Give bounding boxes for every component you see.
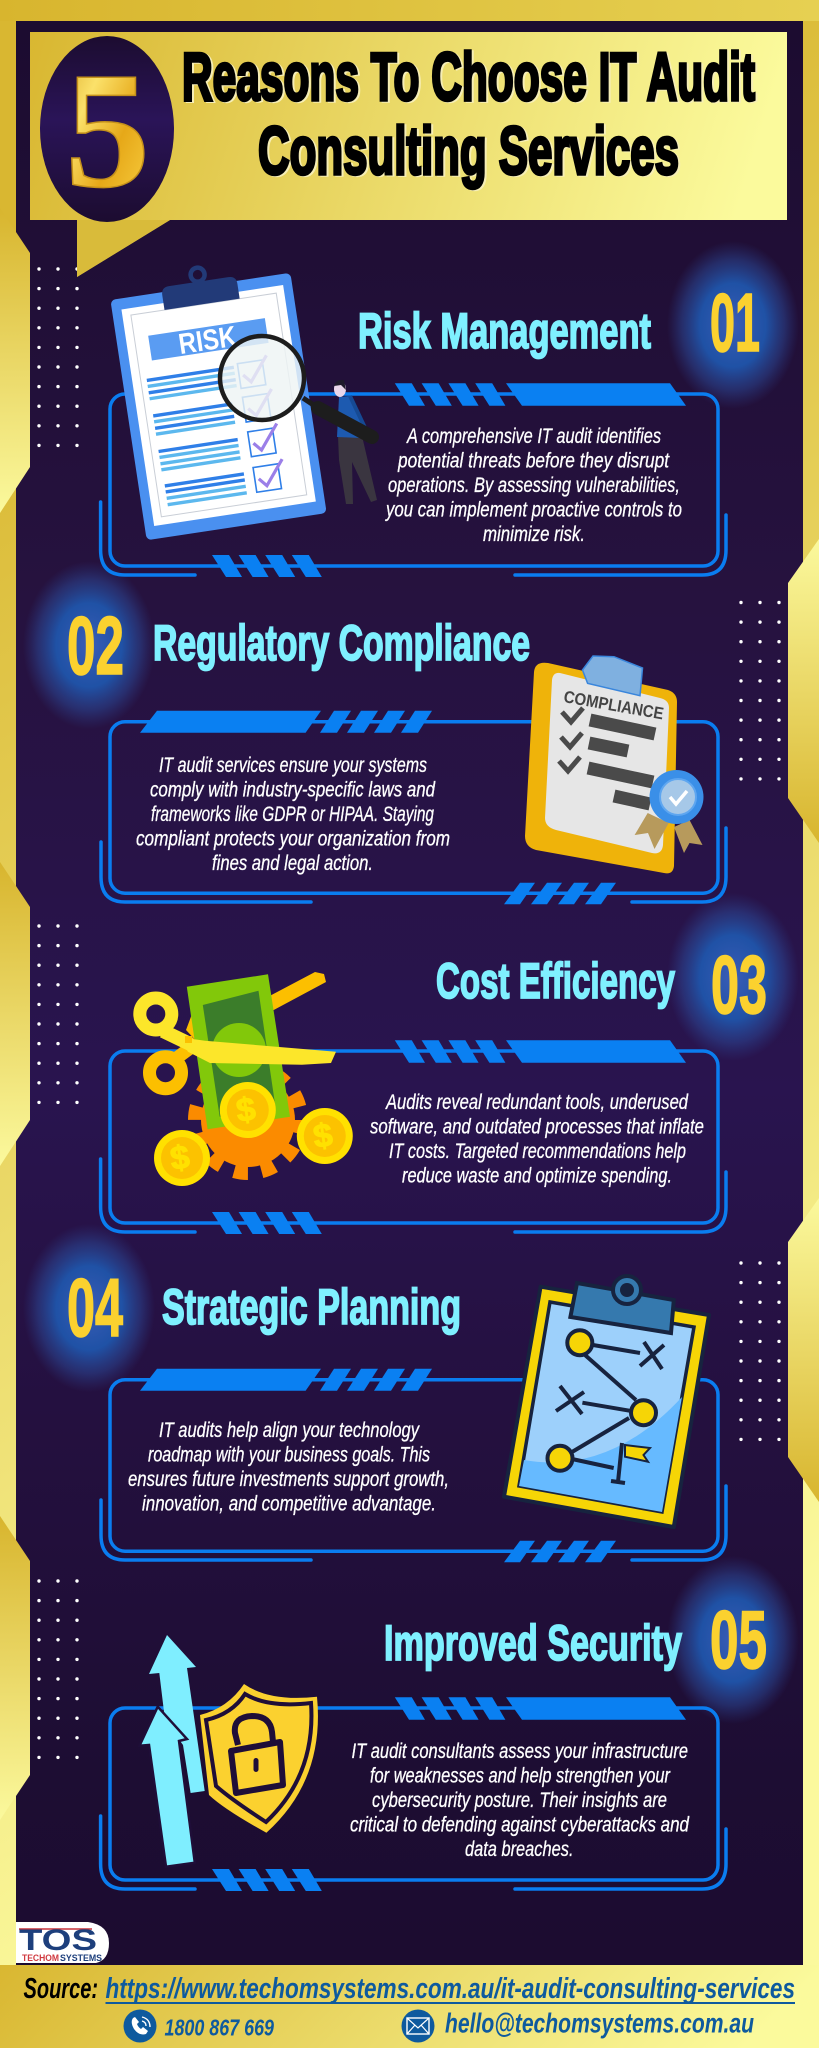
- coins: [154, 1082, 353, 1186]
- number 04: 04: [67, 1261, 123, 1354]
- icon: risk clipboard: RISK: [177, 321, 239, 361]
- body text: for weaknesses and help strengthen your: [370, 1764, 671, 1788]
- body text: IT audit services ensure your systems: [159, 754, 427, 777]
- icon: person with magnifier: [334, 380, 377, 504]
- body text: operations. By assessing vulnerabilities,: [388, 474, 680, 497]
- body text: reduce waste and optimize spending.: [402, 1164, 672, 1188]
- icon: up arrows: [140, 1635, 205, 1867]
- heading: Risk Management: [358, 303, 651, 359]
- icon: compliance clipboard: COMPLIANCE: [562, 687, 665, 723]
- heading: Improved Security: [384, 1615, 682, 1671]
- panel: improved security frame: [101, 1697, 726, 1891]
- body text: cybersecurity posture. Their insights are: [372, 1789, 667, 1812]
- body text: critical to defending against cyberattacks and: [350, 1814, 690, 1836]
- logo: [16, 1922, 109, 1963]
- scissor back blade: [186, 972, 326, 1045]
- number 02: 02: [67, 599, 124, 692]
- coins: $: [311, 1116, 335, 1155]
- title banner: [30, 32, 787, 277]
- body text: [370, 1091, 704, 1188]
- body text: IT audits help align your technology: [159, 1419, 420, 1442]
- body text: [384, 425, 682, 546]
- logo: SYSTEMS: [60, 1953, 102, 1963]
- gear: [195, 1067, 301, 1173]
- body text: fines and legal action.: [212, 852, 373, 875]
- icon: security shield: [200, 1684, 318, 1833]
- source line: Source:: [24, 1973, 98, 2005]
- number 05: 05: [710, 1593, 767, 1686]
- number 01: 01: [710, 276, 760, 369]
- body text: you can implement proactive controls to: [384, 498, 682, 522]
- logo: TOS: [19, 1924, 97, 1957]
- section 4: strategic planning: [67, 1261, 709, 1527]
- blue glows behind numbers: [23, 241, 799, 1724]
- body text: IT costs. Targeted recommendations help: [389, 1140, 686, 1163]
- scissor front blade: [140, 998, 336, 1065]
- body text: comply with industry-specific laws and: [150, 778, 436, 802]
- section 2: regulatory compliance: [67, 599, 704, 875]
- coins: $: [168, 1138, 192, 1177]
- title: [182, 39, 755, 189]
- body text: Audits reveal redundant tools, underused: [384, 1091, 689, 1114]
- body text: frameworks like GDPR or HIPAA. Staying: [151, 803, 434, 826]
- body text: innovation, and competitive advantage.: [142, 1492, 436, 1516]
- panel: regulatory compliance frame: [101, 711, 726, 904]
- icon: email: [402, 2010, 434, 2042]
- body text: software, and outdated processes that inflate: [370, 1116, 704, 1138]
- heading: Cost Efficiency: [436, 953, 675, 1009]
- body text: A comprehensive IT audit identifies: [405, 425, 661, 448]
- dot grids: [37, 267, 781, 1759]
- section 1: risk management: [108, 254, 760, 546]
- number badge ellipse: [40, 36, 174, 222]
- panel: risk management frame: [101, 383, 726, 577]
- number 03: 03: [711, 938, 767, 1031]
- icon: money scissors gear: [140, 972, 353, 1186]
- footer band: [0, 1965, 819, 2048]
- logo: TECHOM: [22, 1953, 59, 1963]
- icon: risk clipboard: [108, 254, 327, 540]
- body text: ensures future investments support growth,: [128, 1468, 449, 1491]
- body text: compliant protects your organization from: [136, 828, 450, 850]
- body text: [350, 1740, 690, 1861]
- scissor bottom ring: [150, 1043, 197, 1089]
- phone number: 1800 867 669: [164, 2014, 274, 2040]
- section 5: improved security: [140, 1593, 767, 1867]
- side gold tabs: [0, 208, 819, 1820]
- body text: data breaches.: [465, 1838, 574, 1861]
- icon: magnifier: [220, 336, 372, 437]
- panel: strategic planning frame: [101, 1369, 726, 1562]
- section 3: cost efficiency: [140, 938, 767, 1188]
- icon: compliance clipboard: [525, 656, 704, 873]
- heading: Regulatory Compliance: [153, 615, 530, 671]
- body text: [128, 1419, 449, 1516]
- icon: phone: [124, 2010, 156, 2042]
- body text: IT audit consultants assess your infrastructure: [352, 1740, 688, 1763]
- body text: potential threats before they disrupt: [397, 450, 670, 472]
- icon: strategy clipboard: [504, 1276, 709, 1527]
- banknote: [187, 974, 290, 1129]
- coins: $: [234, 1090, 258, 1129]
- body text: roadmap with your business goals. This: [148, 1444, 430, 1466]
- panel: cost efficiency frame: [101, 1040, 726, 1234]
- body text: minimize risk.: [483, 523, 585, 546]
- heading: Strategic Planning: [162, 1279, 461, 1335]
- body text: [136, 754, 450, 875]
- big gold five: 5: [65, 38, 150, 222]
